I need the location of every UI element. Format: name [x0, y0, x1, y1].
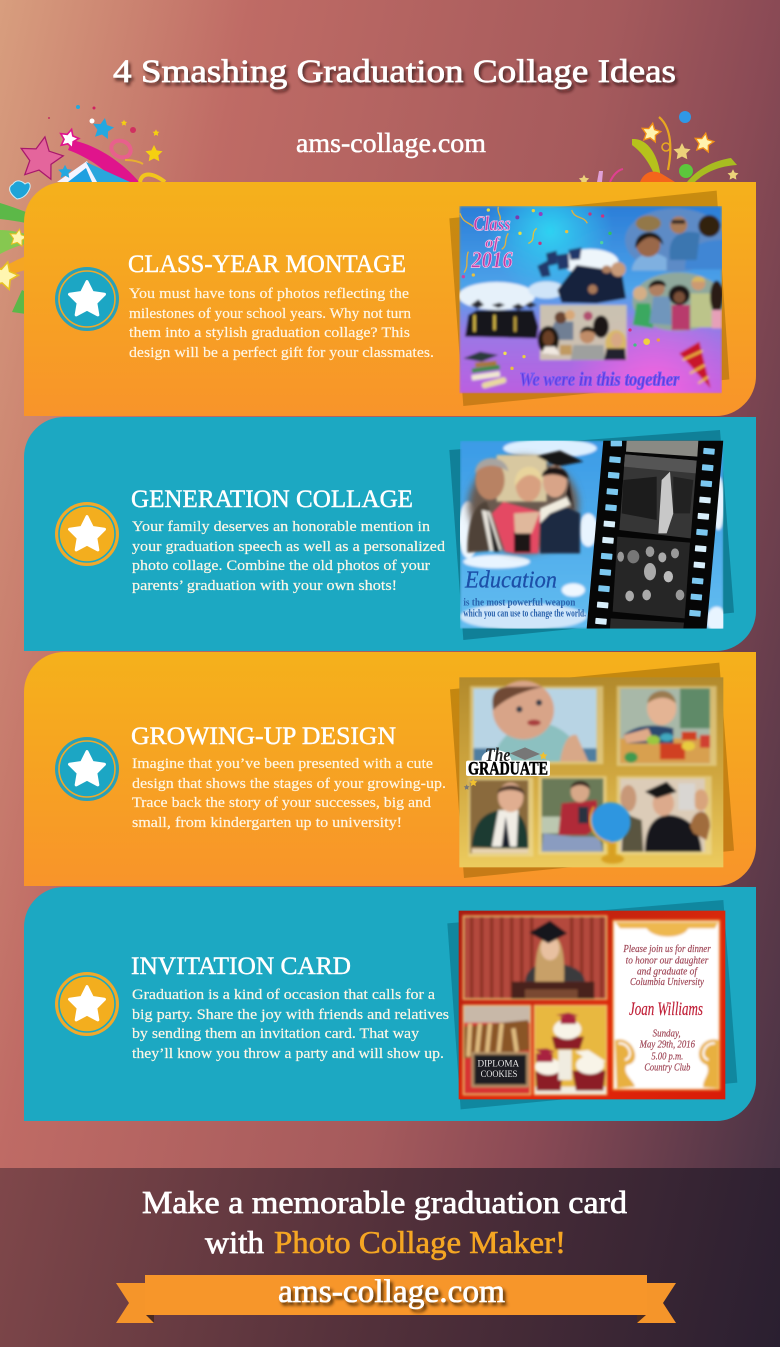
- body text: milestones of your school years. Why not turn: [129, 306, 411, 322]
- invitation text: May 29th, 2016: [639, 1039, 695, 1051]
- collage: the graduate: [450, 663, 734, 878]
- invitation text: Joan Williams: [629, 999, 703, 1020]
- panel: generation collage: [24, 417, 756, 651]
- invitation text: [623, 943, 711, 1074]
- collage caption: together: We were in this together: [519, 370, 680, 391]
- invitation text: 5.00 p.m.: [651, 1050, 683, 1062]
- invitation text: Columbia University: [630, 976, 704, 988]
- body text: Trace back the story of your successes, big and: [132, 795, 432, 811]
- footer call to action: Photo Collage Maker!: [274, 1224, 566, 1260]
- title: 4 Smashing Graduation Collage Ideas: [113, 54, 676, 90]
- collage caption: diploma cookies: COOKIES: [481, 1069, 517, 1079]
- confetti decoration right: [579, 111, 738, 184]
- heading: INVITATION CARD: [131, 951, 351, 980]
- icon: star badge: [55, 502, 119, 566]
- collage caption: quote: is the most powerful weapon: [463, 597, 576, 608]
- body text: photo collage. Combine the old photos of your: [132, 558, 430, 574]
- collage caption: class of 2016: [470, 216, 513, 268]
- panel: class-year montage: [24, 182, 756, 416]
- invitation text: to honor our daughter: [626, 954, 709, 966]
- heading: CLASS-YEAR MONTAGE: [128, 249, 406, 278]
- body text: Imagine that you’ve been presented with a cute: [132, 756, 433, 772]
- collage caption: the graduate: The: [485, 745, 510, 766]
- body text: big party. Share the joy with friends and relatives: [132, 1007, 449, 1023]
- body text: [132, 756, 446, 831]
- body text: design that shows the stages of your growing-up.: [132, 776, 446, 792]
- body text: them into a stylish graduation collage? This: [129, 325, 410, 341]
- footer call to action: [142, 1184, 627, 1260]
- footer band: [0, 1168, 780, 1347]
- footer call to action: Make a memorable graduation card: [142, 1184, 627, 1220]
- body text: parents’ graduation with your own shots!: [132, 578, 397, 594]
- heading: GROWING-UP DESIGN: [131, 721, 396, 750]
- icon: star badge: [55, 737, 119, 801]
- collage caption: class of 2016: Class: [473, 214, 511, 236]
- body text: they’ll know you throw a party and will show up.: [132, 1046, 444, 1062]
- banner website text: ams-collage.com: [278, 1274, 505, 1310]
- collage caption: education: Education: [464, 568, 557, 594]
- body text: [129, 286, 434, 361]
- collage caption: quote: [463, 597, 586, 620]
- icon: star badge: [55, 972, 119, 1036]
- body text: your graduation speech as well as a personalized: [132, 539, 446, 555]
- collage caption: the graduate: GRADUATE: [468, 758, 548, 779]
- collage caption: diploma cookies: [477, 1059, 520, 1079]
- panel: growing-up design: [24, 652, 756, 886]
- body text: by sending them an invitation card. That way: [132, 1026, 420, 1042]
- body text: small, from kindergarten up to university!: [132, 815, 402, 831]
- panel: invitation card: [24, 887, 756, 1121]
- collage: class of 2016: [449, 191, 729, 406]
- body text: [132, 519, 446, 594]
- body text: [132, 987, 449, 1062]
- heading: GENERATION COLLAGE: [131, 484, 413, 513]
- invitation text: Please join us for dinner: [623, 943, 711, 955]
- invitation text: Sunday,: [653, 1028, 681, 1040]
- body text: You must have tons of photos reflecting the: [129, 286, 409, 302]
- icon: star badge: [55, 267, 119, 331]
- collage caption: class of 2016: 2016: [470, 248, 513, 274]
- invitation text: and graduate of: [637, 965, 699, 977]
- website subtitle: ams-collage.com: [296, 128, 486, 158]
- collage caption: the graduate: [464, 745, 550, 790]
- body text: Your family deserves an honorable mention in: [132, 519, 431, 535]
- invitation text: Country Club: [644, 1062, 691, 1074]
- body text: Graduation is a kind of occasion that calls for a: [132, 987, 435, 1003]
- footer call to action: with: [205, 1224, 264, 1260]
- ribbon banner: [116, 1274, 676, 1323]
- collage caption: class of 2016: of: [485, 234, 501, 251]
- collage: graduation invitation: [447, 900, 737, 1109]
- body text: design will be a perfect gift for your classmates.: [129, 345, 434, 361]
- collage caption: diploma cookies: DIPLOMA: [477, 1059, 520, 1069]
- collage: education film strip: [449, 430, 734, 640]
- confetti decoration left: [0, 105, 165, 314]
- collage caption: quote: which you can use to change the world.: [463, 609, 586, 620]
